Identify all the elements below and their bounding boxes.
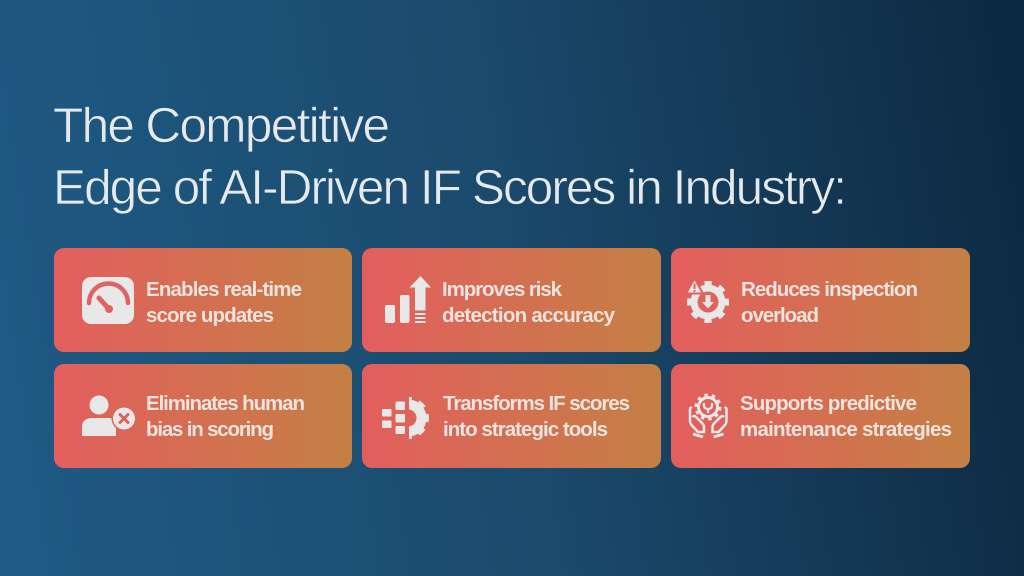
- icon: pixelated gear: [382, 400, 426, 436]
- text: supports predictive maintenance strategies: [740, 392, 952, 441]
- text: reduces inspection overload: [741, 278, 918, 327]
- title: The Competitive: [53, 98, 390, 153]
- icon: hands holding gear: [690, 395, 726, 437]
- text: reduces inspection overload: Reduces inspection: [741, 278, 918, 301]
- text: improves risk detection accuracy: Improves risk: [442, 278, 563, 301]
- text: transforms IF scores into strategic tools: into strategic tools: [443, 418, 608, 441]
- text: improves risk detection accuracy: detection accuracy: [442, 304, 616, 327]
- text: transforms IF scores into strategic tools: [443, 392, 630, 441]
- icon: rising bars with arrow: [385, 276, 431, 323]
- text: eliminates human bias in scoring: [146, 392, 305, 441]
- text: supports predictive maintenance strategies: Supports predictive: [740, 392, 917, 415]
- text: improves risk detection accuracy: [442, 278, 616, 327]
- panel: inspection overload: [671, 248, 970, 352]
- text: transforms IF scores into strategic tools: Transforms IF scores: [443, 392, 630, 415]
- panel: real-time score updates: [54, 248, 352, 352]
- text: reduces inspection overload: overload: [741, 304, 819, 327]
- icon: person with x mark: [82, 396, 136, 436]
- text: eliminates human bias in scoring: Eliminates human: [146, 392, 305, 415]
- panel: risk detection accuracy: [362, 248, 661, 352]
- icon: gauge: [82, 277, 134, 324]
- panel: transforms IF scores: [362, 364, 661, 468]
- text: supports predictive maintenance strategies: maintenance strategies: [740, 418, 952, 441]
- icon: gear with warning and down arrow: [686, 278, 726, 320]
- panel: eliminates human bias: [54, 364, 352, 468]
- title: [53, 98, 847, 215]
- text: enables real-time score updates: [146, 278, 302, 327]
- text: enables real-time score updates: Enables real-time: [146, 278, 302, 301]
- title: Edge of AI-Driven IF Scores in Industry:: [53, 160, 847, 215]
- panel: predictive maintenance: [671, 364, 970, 468]
- text: enables real-time score updates: score updates: [146, 304, 274, 327]
- text: eliminates human bias in scoring: bias in scoring: [146, 418, 274, 441]
